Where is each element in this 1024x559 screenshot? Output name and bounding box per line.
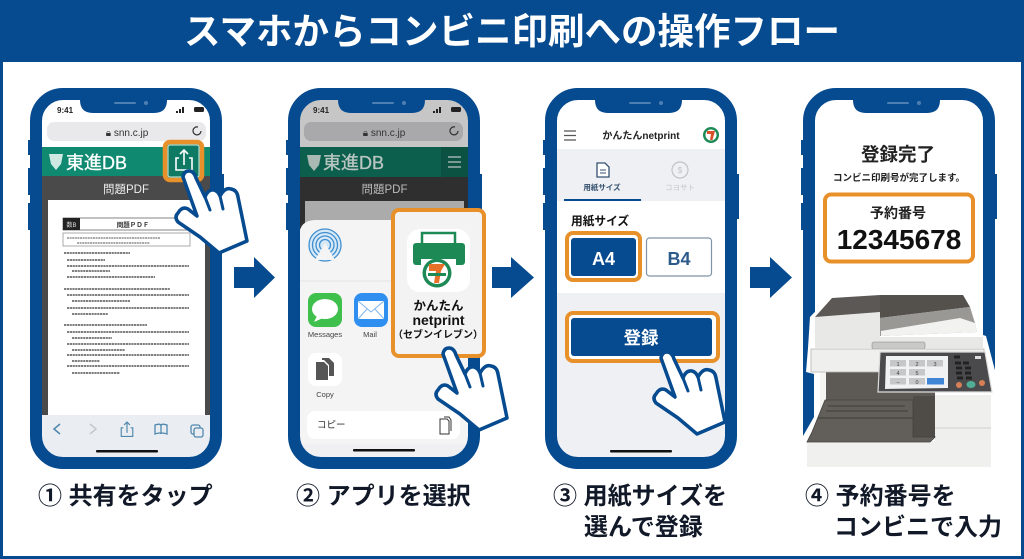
paper size section: 用紙サイズ: [571, 214, 629, 228]
highlighted netprint app: （セブンイレブン）: [393, 328, 483, 341]
dimmed browser screen: 問題PDF: [362, 183, 408, 196]
register button: [567, 313, 718, 361]
icon: tapping hand: [176, 171, 247, 253]
icon: tapping hand: [436, 348, 507, 430]
step 2 label: ② アプリを選択: [296, 483, 471, 510]
browser screen: 🔒︎ snn.c.jp: [106, 128, 149, 139]
copy row: コピー: [317, 420, 346, 431]
tab: paper size: 用紙サイズ: [583, 182, 621, 192]
icon: copy: [308, 353, 342, 399]
step 4 label: ④ 予約番号を: [805, 483, 956, 510]
title banner: [0, 0, 1024, 62]
paper size section: [557, 201, 726, 293]
control panel: –: [896, 380, 900, 386]
step 4 label: [805, 483, 1002, 541]
tab: paper size: [564, 163, 641, 201]
control panel: 3: [933, 362, 937, 368]
browser screen: 問題PDF: [103, 183, 149, 196]
highlighted netprint app: netprint: [412, 312, 465, 328]
phone 2: app selection: [286, 94, 507, 463]
arrow 1: [234, 257, 275, 298]
icon: airdrop: [309, 229, 341, 261]
icon: tapping hand: [654, 352, 725, 434]
dimmed browser screen: 9:41: [313, 106, 330, 115]
icon: messages: Messages: [308, 330, 342, 339]
app screen: [557, 100, 726, 457]
icon: copy: Copy: [316, 390, 334, 399]
copy row: [307, 411, 460, 439]
question document: [63, 218, 190, 373]
browser screen: 東進DB: [66, 153, 127, 173]
tab: copies: $: [678, 166, 683, 175]
highlighted share button: [165, 142, 202, 180]
reservation number box: [825, 194, 973, 262]
dimmed browser screen: [299, 100, 470, 231]
icon: messages: [308, 293, 342, 339]
B4 button: B4: [667, 249, 691, 269]
printer illustration: [803, 292, 997, 470]
arrow 2: [492, 257, 534, 298]
icon: mail: [354, 293, 388, 339]
step 3 label: [553, 482, 727, 541]
browser screen: 9:41: [57, 106, 74, 115]
reservation number box: 12345678: [837, 224, 961, 255]
control panel: 5: [915, 371, 919, 377]
icon: mail: Mail: [363, 330, 377, 339]
tab: copies: コヨサト: [665, 183, 695, 192]
icon: netprint app: [407, 229, 470, 292]
arrow 3: [750, 257, 792, 298]
control panel: 1: [896, 362, 900, 368]
reservation number box: 予約番号: [870, 205, 926, 221]
highlighted netprint app: かんたん: [413, 299, 464, 313]
step 1 label: ① 共有をタップ: [38, 483, 213, 510]
app screen: かんたんnetprint: [602, 130, 680, 142]
phone 1: share tap: [28, 94, 247, 463]
completion note: コンビニ印刷号が完了します。: [833, 172, 965, 184]
control panel: [878, 352, 992, 392]
step 4 label: コンビニで入力: [834, 514, 1002, 541]
A4 button: A4: [592, 249, 615, 269]
scanner: [815, 312, 880, 338]
tab: copies: [665, 162, 695, 192]
step 3 label: 選んで登録: [584, 514, 703, 541]
phone 4: reservation number: [801, 94, 997, 470]
completion heading: 登録完了: [861, 144, 935, 165]
browser screen: [42, 100, 212, 457]
white halo: [803, 292, 997, 470]
title banner: スマホからコンビニ印刷への操作フロー: [184, 11, 840, 52]
A4 button: [567, 233, 640, 280]
question document: 数B: [66, 221, 77, 229]
question document: 問題ＰＤＦ: [117, 221, 149, 229]
browser toolbar: [42, 415, 212, 457]
dimmed browser screen: 🔒︎ snn.c.jp: [363, 128, 406, 139]
control panel: 0: [915, 380, 919, 386]
step 3 label: ③ 用紙サイズを: [553, 482, 727, 510]
B4 button: [646, 238, 712, 276]
phone 3: paper size: [543, 94, 739, 463]
dimmed browser screen: 東進DB: [323, 153, 384, 173]
register button: 登録: [624, 328, 659, 348]
share sheet: [299, 220, 470, 457]
control panel: 4: [896, 371, 900, 377]
control panel: 2: [915, 362, 919, 368]
highlighted netprint app: [393, 210, 484, 356]
lower body: [807, 441, 991, 467]
